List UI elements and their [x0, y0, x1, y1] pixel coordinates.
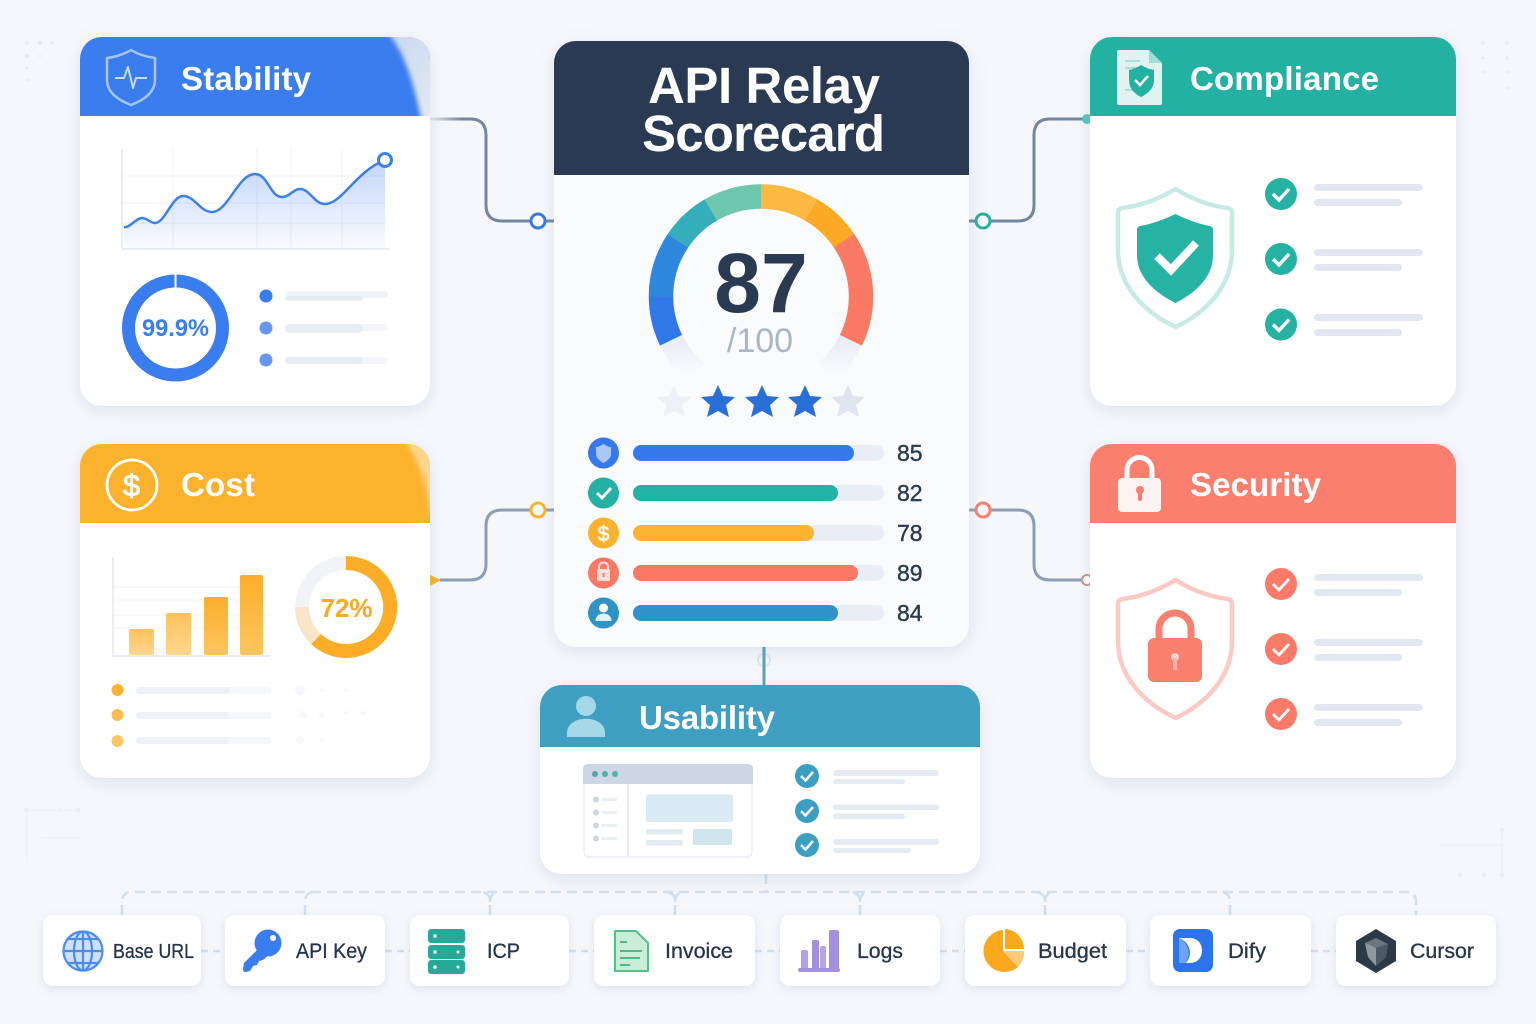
icon: document with shield — [1117, 50, 1162, 105]
title: API Relay — [648, 57, 881, 114]
panel: api relay scorecard — [554, 41, 969, 647]
line chart — [122, 149, 392, 249]
icon: user — [567, 696, 605, 737]
score row: usability 84 — [588, 598, 923, 628]
chip: invoice — [594, 915, 755, 986]
legend list — [260, 290, 388, 366]
connector: cost to scorecard — [430, 503, 554, 586]
bar chart — [113, 557, 270, 656]
score row: security 89: 89 — [897, 560, 923, 586]
score value: 87 — [714, 236, 808, 330]
icon: padlock — [1118, 457, 1161, 512]
chip: logs: Logs — [857, 940, 903, 963]
score denominator: /100 — [727, 322, 793, 360]
icon: dify logo — [1173, 929, 1213, 972]
chip: cursor — [1336, 915, 1496, 986]
score row: cost 78 — [588, 518, 923, 548]
chip: budget — [965, 915, 1126, 986]
icon: large shield with lock — [1118, 580, 1232, 718]
checklist — [1265, 178, 1423, 340]
panel: compliance — [1090, 37, 1456, 406]
donut: 72 percent — [302, 563, 390, 651]
score row: stability 85 — [588, 438, 923, 468]
score row: compliance 82: 82 — [897, 480, 923, 506]
chip: cursor: Cursor — [1410, 940, 1474, 963]
connector: dashed tool bus — [122, 874, 1416, 951]
gauge — [661, 196, 861, 373]
icon: server stack — [428, 929, 465, 974]
score row: security 89 — [588, 558, 923, 588]
chip: base url — [43, 915, 201, 986]
chip: budget: Budget — [1038, 940, 1107, 963]
score row: cost 78: 78 — [897, 520, 923, 546]
heading: cost: Cost — [181, 466, 255, 503]
donut: uptime: 99.9% — [142, 316, 209, 342]
panel: stability — [80, 30, 440, 406]
heading: security: Security — [1190, 466, 1322, 503]
score row: cost 78: $ — [598, 523, 610, 546]
chip: dify — [1150, 915, 1311, 986]
heading: usability: Usability — [639, 699, 776, 736]
chip: logs — [780, 915, 940, 986]
chip: base url: Base URL — [113, 941, 194, 963]
chip: icp: ICP — [487, 940, 520, 963]
donut: uptime — [128, 273, 222, 375]
icon: globe — [64, 932, 102, 970]
title — [642, 57, 885, 162]
panel: usability — [540, 685, 980, 874]
connector: scorecard to usability — [758, 647, 770, 685]
panel: cost — [80, 438, 440, 778]
browser window mockup — [583, 764, 753, 857]
connector: compliance to scorecard — [969, 114, 1092, 228]
connector: security to scorecard — [969, 503, 1092, 585]
icon: document — [615, 931, 648, 971]
title: Scorecard — [642, 105, 885, 162]
score row: usability 84: 84 — [897, 600, 923, 626]
chip: icp — [410, 915, 569, 986]
checklist — [795, 764, 939, 857]
chip: api key: API Key — [296, 940, 367, 963]
checklist — [1265, 568, 1423, 730]
chip: api key — [225, 915, 385, 986]
heading: stability: Stability — [181, 60, 312, 97]
score row: stability 85: 85 — [897, 440, 923, 466]
connector: stability to scorecard — [430, 119, 554, 228]
heading: compliance: Compliance — [1190, 60, 1379, 97]
panel: security — [1090, 444, 1456, 778]
icon: dollar coin: $ — [123, 468, 140, 503]
icon: pie chart — [983, 929, 1024, 972]
icon: large shield with check — [1118, 189, 1232, 327]
icon: cursor logo — [1356, 929, 1396, 973]
chip: invoice: Invoice — [665, 940, 733, 963]
legend list — [112, 684, 366, 747]
icon: dollar coin — [107, 460, 157, 510]
score row: compliance 82 — [588, 478, 923, 508]
icon: shield with heartbeat — [107, 50, 155, 105]
chip: dify: Dify — [1228, 940, 1267, 963]
icon: log bars — [798, 930, 840, 972]
donut: 72 percent: 72% — [320, 593, 373, 623]
icon: key — [243, 930, 282, 972]
star rating — [657, 385, 865, 417]
